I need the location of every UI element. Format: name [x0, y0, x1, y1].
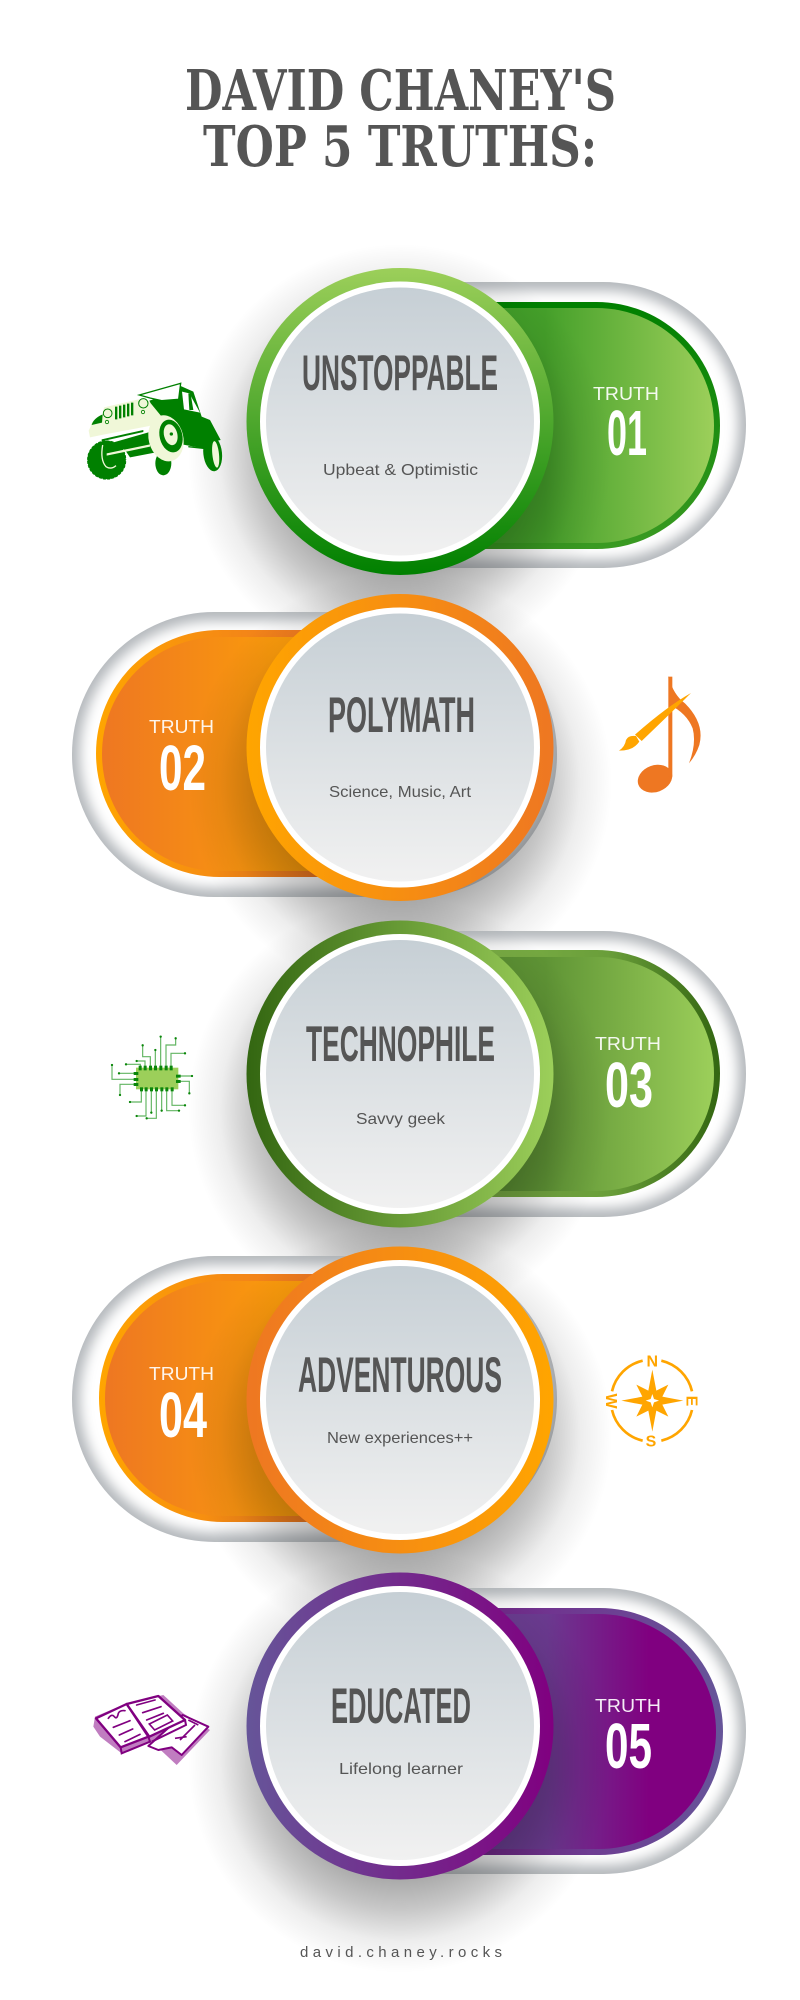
panel: truth 02 — [72, 592, 701, 954]
pill: truth 02 — [72, 612, 557, 897]
panel: truth 01 — [87, 259, 746, 628]
circle: unstoppable — [246, 268, 554, 575]
pill: truth 05 — [441, 1588, 746, 1874]
circle: adventurous — [246, 1246, 554, 1554]
icon: jeep — [87, 383, 224, 480]
label: truth 02: TRUTH — [149, 716, 214, 737]
label: truth 05: TRUTH — [595, 1695, 661, 1716]
circle: polymath: Science, Music, Art — [329, 784, 472, 801]
label: truth 03: TRUTH — [595, 1033, 661, 1054]
circle: unstoppable: UNSTOPPABLE — [302, 345, 498, 401]
label: truth 01 — [593, 383, 659, 469]
circle: educated — [246, 1572, 554, 1880]
panel: truth 04 — [72, 1244, 698, 1606]
circle: adventurous: New experiences++ — [327, 1430, 473, 1447]
label: truth 05: 05 — [605, 1710, 652, 1782]
label: truth 05 — [595, 1695, 661, 1782]
label: truth 01: TRUTH — [593, 383, 659, 404]
pill: truth 03 — [456, 931, 746, 1217]
pill: truth 01 — [446, 282, 746, 568]
icon: compass: W — [602, 1393, 619, 1409]
circle: technophile: Savvy geek — [356, 1111, 446, 1128]
label: truth 04: TRUTH — [149, 1363, 214, 1384]
circle: technophile — [246, 920, 554, 1228]
icon: compass: E — [683, 1396, 700, 1407]
title: TOP 5 TRUTHS: — [203, 114, 597, 180]
label: truth 01: 01 — [607, 397, 647, 469]
footer: david.chaney.rocks — [300, 1944, 502, 1961]
icon: open books — [93, 1695, 210, 1765]
icon: compass: S — [646, 1433, 657, 1450]
icon: compass — [602, 1353, 700, 1450]
label: truth 02: 02 — [159, 732, 206, 804]
label: truth 03: 03 — [605, 1049, 653, 1121]
circle: educated: EDUCATED — [331, 1678, 471, 1734]
panel: truth 03 — [110, 918, 746, 1280]
label: truth 04: 04 — [159, 1379, 207, 1451]
icon: compass: N — [647, 1353, 658, 1370]
label: truth 04 — [149, 1363, 214, 1451]
circle: educated: Lifelong learner — [339, 1761, 464, 1778]
circle: technophile: TECHNOPHILE — [306, 1016, 495, 1072]
label: truth 02 — [149, 716, 214, 804]
icon: circuit chip — [111, 1035, 193, 1119]
title — [185, 58, 616, 180]
circle: polymath — [246, 594, 554, 901]
icon: music note with paintbrush — [619, 676, 701, 797]
label: truth 03 — [595, 1033, 661, 1121]
circle: unstoppable: Upbeat & Optimistic — [323, 462, 478, 479]
title: DAVID CHANEY'S — [185, 58, 616, 124]
panel: truth 05 — [93, 1549, 746, 1973]
circle: polymath: POLYMATH — [328, 687, 475, 743]
circle: adventurous: ADVENTUROUS — [298, 1347, 502, 1403]
pill: truth 04 — [72, 1256, 557, 1542]
